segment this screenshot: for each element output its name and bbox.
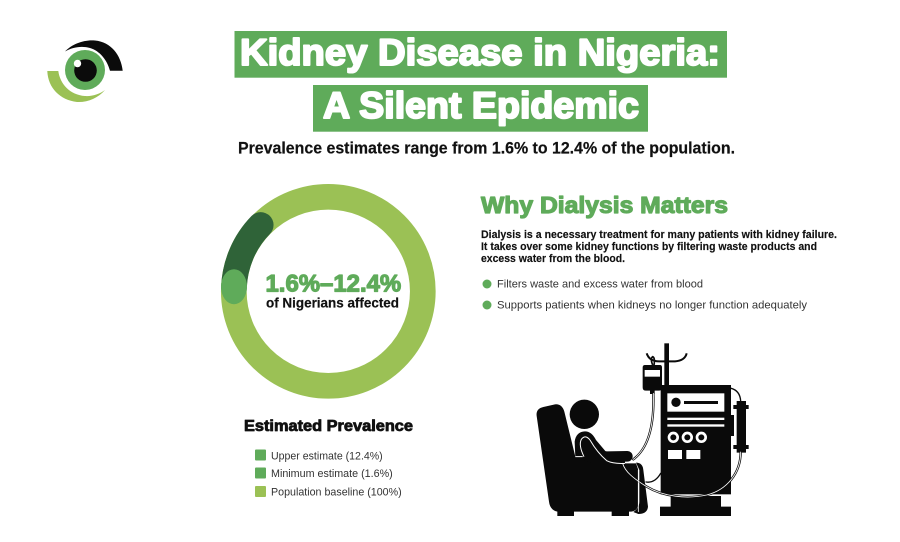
donut chart	[221, 197, 423, 386]
iv bag	[651, 357, 654, 365]
heading: why dialysis matters: Why Dialysis Matters	[481, 192, 728, 218]
machine buttons	[668, 450, 682, 459]
patient arm	[590, 445, 627, 457]
bullet: supports patients: Supports patients when kidneys no longer function adequately	[497, 300, 807, 312]
filter cylinder	[733, 401, 749, 453]
minimum estimate marker	[221, 269, 247, 304]
machine body	[661, 385, 731, 494]
legend item: population baseline: Population baseline (100%)	[271, 486, 402, 498]
patient head	[570, 400, 599, 429]
dialysis description: It takes over some kidney functions by filtering waste products and	[481, 241, 817, 253]
subtitle: Prevalence estimates range from 1.6% to 12.4% of the population.	[238, 140, 735, 158]
machine screen	[667, 393, 724, 412]
machine dials	[669, 433, 706, 442]
legend item: minimum estimate: Minimum estimate (1.6%)	[271, 468, 393, 480]
title line 2: A Silent Epidemic	[323, 85, 639, 126]
patient torso	[575, 431, 625, 463]
iv pole	[664, 343, 669, 385]
arm outline highlight	[575, 437, 625, 463]
donut value: 1.6%–12.4%	[266, 271, 401, 298]
machine stripes	[667, 418, 724, 420]
upper estimate arc	[234, 225, 261, 287]
donut caption: of Nigerians affected	[266, 296, 399, 311]
bullet: filters waste: Filters waste and excess water from blood	[497, 278, 703, 290]
dialysis description: excess water from the blood.	[481, 253, 625, 265]
dialysis description	[481, 229, 837, 265]
title line 1: Kidney Disease in Nigeria:	[240, 32, 720, 73]
legend	[244, 418, 413, 498]
legend heading: Estimated Prevalence	[244, 418, 413, 435]
icon: eye logo	[47, 40, 123, 102]
armchair	[537, 404, 638, 516]
icon: patient on dialysis machine	[537, 343, 749, 516]
tubes	[623, 388, 741, 512]
machine base	[660, 496, 731, 516]
dialysis description: Dialysis is a necessary treatment for many patients with kidney failure.	[481, 229, 837, 241]
patient leg	[633, 463, 648, 514]
legend item: upper estimate: Upper estimate (12.4%)	[271, 450, 383, 462]
